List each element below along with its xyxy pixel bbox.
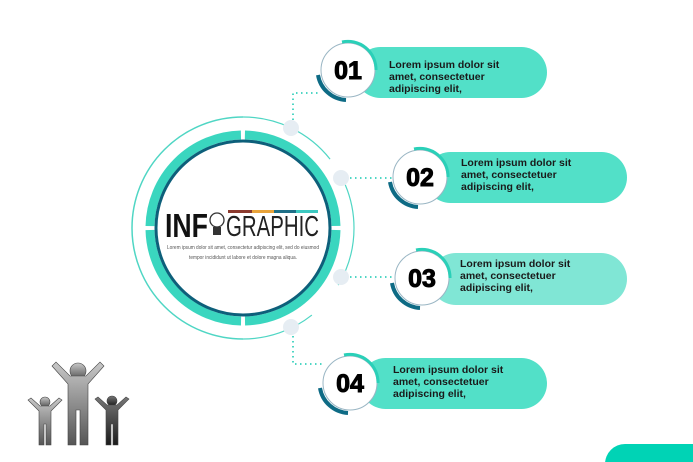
logo: tempor incididunt ut labore et dolore magna aliqua. <box>189 255 297 261</box>
text 01 <box>389 59 500 95</box>
text 02: amet, consectetuer <box>461 169 557 181</box>
text 02: adipiscing elit, <box>461 181 534 193</box>
text 04 <box>393 364 504 400</box>
main circle <box>132 117 354 339</box>
numbers: 01 <box>334 57 362 85</box>
text 02 <box>461 157 572 193</box>
text 01: amet, consectetuer <box>389 71 485 83</box>
text 04: Lorem ipsum dolor sit <box>393 364 503 376</box>
connector nodes <box>283 120 349 335</box>
logo: GRAPHIC <box>226 211 319 243</box>
logo: INF <box>165 207 208 244</box>
pills <box>355 47 693 462</box>
numbers <box>334 57 436 398</box>
numbers: 02 <box>406 164 434 192</box>
text 03: adipiscing elit, <box>460 282 533 294</box>
logo: Lorem ipsum dolor sit amet, consectetur adipiscing elit, sed do eiusmod <box>167 245 319 251</box>
text 04: amet, consectetuer <box>393 376 489 388</box>
text 04: adipiscing elit, <box>393 388 466 400</box>
number badges <box>318 41 450 413</box>
text 03 <box>460 258 570 294</box>
logo <box>165 207 319 261</box>
numbers: 04 <box>336 370 364 398</box>
connectors <box>293 93 392 364</box>
numbers: 03 <box>408 265 436 293</box>
text 03: Lorem ipsum dolor sit <box>460 258 570 270</box>
text 03: amet, consectetuer <box>460 270 556 282</box>
text 01: adipiscing elit, <box>389 83 462 95</box>
text 01: Lorem ipsum dolor sit <box>389 59 499 71</box>
text 02: Lorem ipsum dolor sit <box>461 157 571 169</box>
